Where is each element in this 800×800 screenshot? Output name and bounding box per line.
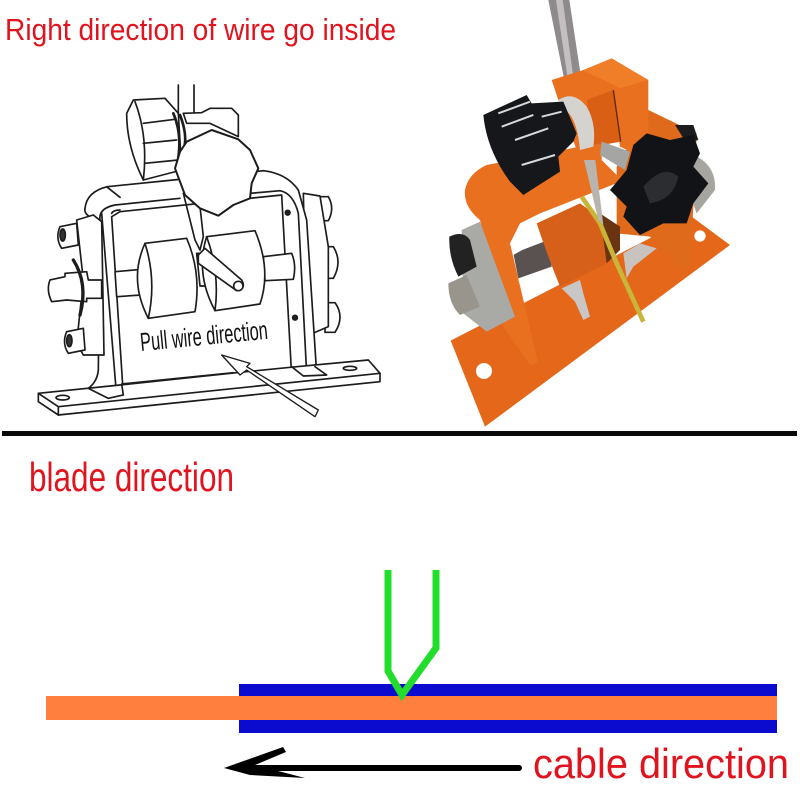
arrow outline: [222, 355, 318, 417]
top block: [552, 58, 648, 160]
blade: [183, 193, 203, 250]
star knob: [175, 130, 258, 216]
left flange and bolts: [77, 215, 104, 355]
label: cable direction: cable direction: [533, 740, 789, 787]
rollers: [137, 238, 197, 318]
right bolts: [320, 197, 340, 332]
base plate: [451, 217, 730, 427]
title: right direction of wire: Right direction of wire go inside: [5, 12, 396, 47]
axle: [115, 253, 295, 297]
base plate: [38, 360, 380, 415]
frame inner lines: [100, 187, 307, 373]
roller: [537, 203, 620, 287]
arrow: cable direction: [224, 747, 519, 778]
axle: [513, 240, 552, 278]
star knob: [610, 133, 708, 235]
left black knob: [483, 95, 577, 195]
center spacer: [197, 253, 208, 286]
wing nuts: [562, 280, 590, 320]
cable diagram: [46, 570, 777, 733]
cable insulation: [239, 684, 777, 733]
blade: [584, 160, 603, 225]
washer: [558, 96, 594, 150]
heading: blade direction: blade direction: [29, 454, 234, 500]
label: pull wire direction: Pull wire direction: [139, 315, 269, 357]
top block: [183, 108, 238, 137]
wire: [582, 197, 643, 322]
handle rod: [548, 0, 582, 83]
right silver disc: [687, 153, 715, 213]
divider line: [2, 431, 797, 436]
green blade: [388, 570, 436, 695]
photo: orange wire stripper machine: [448, 0, 730, 427]
left nut: [448, 275, 480, 315]
rod: [178, 85, 194, 113]
left knob: [127, 98, 182, 180]
silver bolt: [600, 142, 630, 170]
left silver flange: [462, 222, 515, 332]
right flange: [303, 193, 328, 333]
line drawing: wire stripper machine: [38, 85, 380, 417]
window: [512, 223, 540, 255]
frame bracket: [465, 143, 633, 365]
pin: [198, 248, 243, 291]
back of frame: [85, 171, 327, 398]
cable conductor: [46, 696, 777, 720]
far wall and leg: [617, 110, 697, 267]
